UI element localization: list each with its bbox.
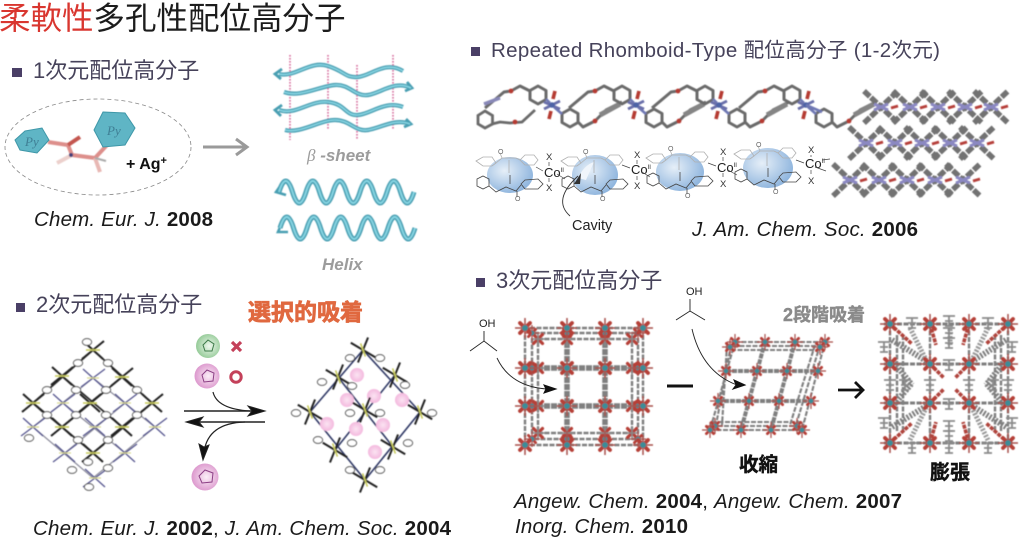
reference: 2004/2007: Angew. Chem. 2004, Angew. Chem. 2007 [512,490,902,513]
Co labels: O [685,193,691,200]
Co labels: X [634,181,641,192]
cavity blobs [487,148,793,195]
label: beta-sheet: β -sheet [306,146,372,165]
Co labels: X [808,145,815,156]
crystal chain [478,86,876,128]
framework: as-synthesized [515,318,653,455]
Co labels: Co [544,165,561,180]
Co labels: Co [717,160,734,175]
Co labels: Co [631,162,648,177]
arrow: guest into pore left [497,358,556,393]
beta-sheet ribbons [275,55,412,140]
arrow: black [838,382,863,398]
Co labels: O [773,189,779,196]
label: Cavity: Cavity [572,218,613,234]
isopropanol middle: OH [686,286,703,298]
isopropanol left: OH [479,318,496,330]
label: helix: Helix [322,255,364,274]
Co labels: II [734,163,737,169]
mark: cross [232,342,241,351]
cavity arrow [563,173,581,216]
heading: 1D: 1次元配位高分子 [33,58,199,83]
label: Ag ion: + Ag [126,156,161,173]
reference: 2002/2004: Chem. Eur. J. 2002, J. Am. Chem. Soc. 2004 [33,517,452,540]
Co labels: O [600,196,606,203]
label: contraction: 收縮 [739,454,778,476]
framework: contracted [702,334,833,438]
Co labels: O [498,149,504,156]
dashed ellipse with ligand [5,99,191,195]
Co labels: O [756,142,762,149]
heading: 2D: 2次元配位高分子 [36,292,202,317]
guest molecule: released [192,464,218,490]
label: expansion: 膨張 [930,461,970,484]
Co labels: II [561,168,564,174]
Co labels: II [822,159,825,165]
Co labels [498,142,825,203]
section: rhomboid-type [471,39,1008,241]
isopropanol middle [676,286,705,320]
section: 2D coordination polymers [16,292,452,540]
guest molecule: accepted [194,364,220,388]
arrow: guest into pore middle [692,329,745,389]
framework: expanded [878,314,1018,453]
minus sign [667,384,693,388]
icon: ligand backbone [48,137,107,172]
Co labels: O [515,196,521,203]
Co labels: X [546,183,553,194]
arrow: gray [203,139,247,155]
Co labels: O [668,146,674,153]
loaded 2D framework [291,337,437,493]
label: two-step adsorption: 2段階吸着 [783,305,865,325]
section: 3D coordination polymers [470,268,1018,538]
icon: Py ring left: Py [24,134,39,149]
reference: 2006: J. Am. Chem. Soc. 2006 [691,218,918,241]
crystal network [833,91,1008,196]
Co labels: X [808,176,815,187]
label: selective adsorption: 選択的吸着 [248,299,363,325]
guest molecule: rejected [196,334,220,358]
icon: Py ring right: Py [106,123,121,138]
label: Ag ion: + [161,155,167,167]
cavity highlight [578,162,594,180]
section: 1D coordination polymers [5,55,415,274]
icon: Py ring right [94,112,135,147]
Co labels: Co [805,156,822,171]
heading: rhomboid: Repeated Rhomboid-Type 配位高分子 (1-2次元) [491,39,940,62]
Co labels: X [720,179,727,190]
Co labels: X [720,147,727,158]
reference: 2010: Inorg. Chem. 2010 [515,515,688,538]
reference: 2008: Chem. Eur. J. 2008 [34,208,213,231]
Co labels: O [583,149,589,156]
Co labels: X [634,150,641,161]
Co labels: X [546,152,553,163]
arrows: equilibrium [184,392,265,460]
Co labels: II [648,165,651,171]
structural formula chain [476,142,830,203]
empty 2D framework [21,339,167,490]
heading: 3D: 3次元配位高分子 [496,268,662,293]
mark: circle [231,372,241,382]
isopropanol left [470,318,497,351]
icon: Py ring left [15,128,49,153]
helix ribbons [276,181,415,239]
title: 柔軟性多孔性配位高分子 [0,0,346,36]
